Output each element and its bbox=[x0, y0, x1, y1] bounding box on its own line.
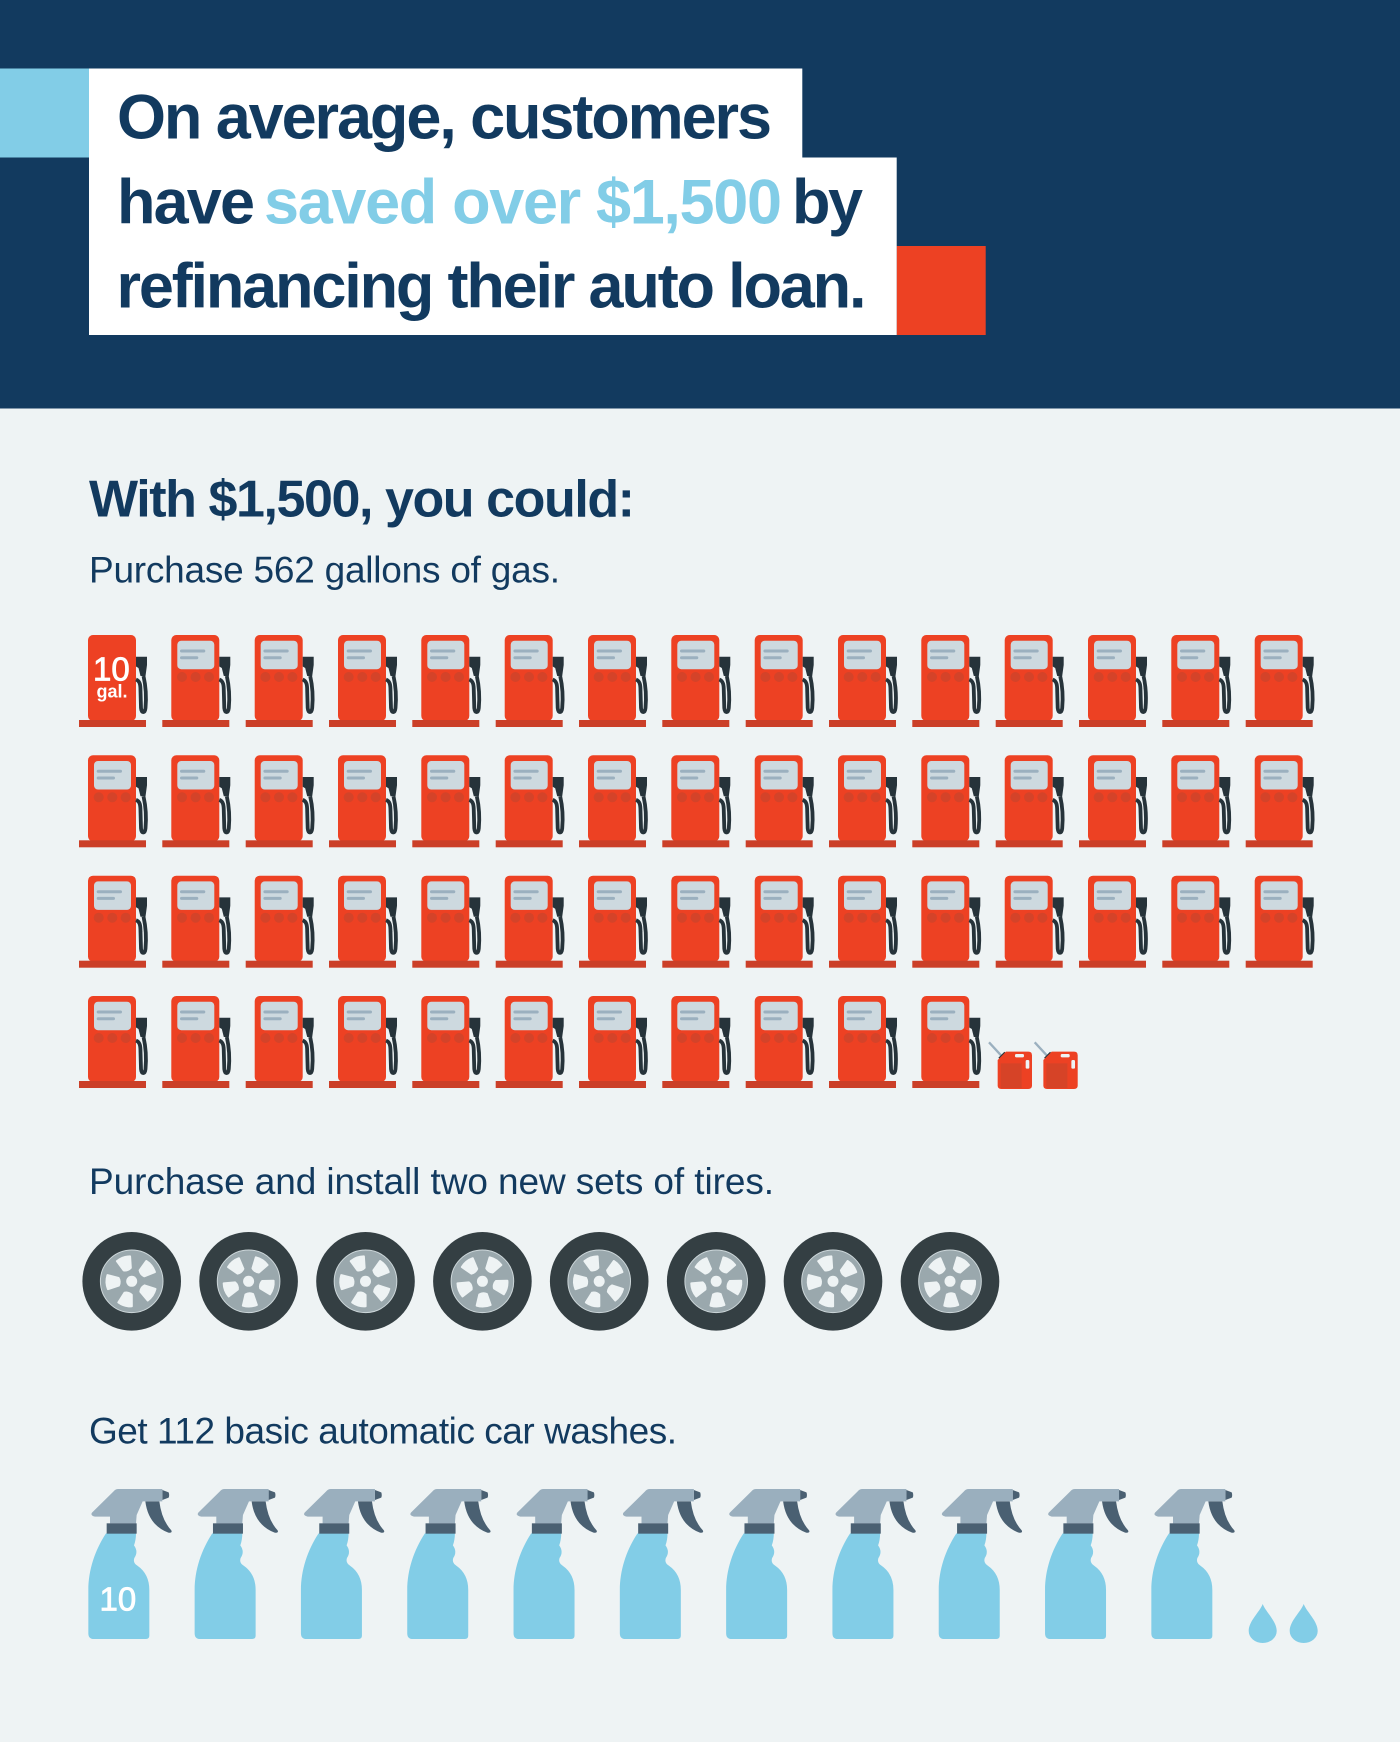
icon: spray bottle bbox=[620, 1489, 703, 1639]
icon: spray bottle bbox=[939, 1489, 1022, 1639]
icon: tire bbox=[784, 1232, 882, 1331]
icon: gas can bbox=[989, 1042, 1032, 1089]
section heading: With $1,500, you could: bbox=[89, 471, 635, 529]
red accent square bbox=[897, 246, 986, 335]
icon: spray bottle bbox=[832, 1489, 916, 1639]
car wash label: Get 112 basic automatic car washes. bbox=[89, 1410, 677, 1452]
icon: spray bottle bbox=[407, 1489, 491, 1639]
icon: spray bottle bbox=[514, 1489, 597, 1639]
icon: tire bbox=[199, 1232, 298, 1331]
tire icon row bbox=[82, 1232, 999, 1331]
icon: tire bbox=[901, 1232, 999, 1331]
title: by bbox=[792, 168, 863, 238]
icon: tire bbox=[433, 1232, 532, 1331]
icon: spray bottle labelled 10 bbox=[88, 1489, 172, 1639]
icon: spray bottle bbox=[726, 1489, 809, 1639]
icon: gas pump labelled 10 gal. bbox=[79, 635, 147, 727]
title: On average, customers bbox=[117, 82, 772, 152]
title: saved over $1,500 bbox=[264, 168, 782, 238]
gas label: Purchase 562 gallons of gas. bbox=[89, 550, 560, 590]
icon: tire bbox=[82, 1232, 181, 1331]
title: have bbox=[117, 168, 255, 238]
icon: spray bottle bbox=[195, 1489, 278, 1639]
stepped white title panel bbox=[89, 68, 897, 335]
icon: tire bbox=[550, 1232, 648, 1331]
icon: spray bottle bbox=[301, 1489, 384, 1639]
title bbox=[116, 82, 866, 322]
light blue accent square bbox=[0, 68, 89, 158]
title: refinancing their auto loan. bbox=[116, 252, 866, 322]
icon: spray bottle bbox=[1151, 1489, 1235, 1639]
row 3 of gas pumps bbox=[79, 876, 1314, 968]
icon: spray bottle bbox=[1045, 1489, 1128, 1639]
icon: gas pump labelled 10 gal.: gal. bbox=[96, 682, 128, 702]
icon: gas pump labelled 10 gal.: 10 bbox=[93, 651, 130, 688]
row 1 of gas pumps bbox=[162, 635, 1314, 727]
icon: tire bbox=[316, 1232, 415, 1331]
tires label: Purchase and install two new sets of tires. bbox=[89, 1161, 774, 1202]
icon: water drop bbox=[1290, 1604, 1318, 1643]
row 2 of gas pumps bbox=[79, 755, 1314, 847]
icon: water drop bbox=[1249, 1604, 1277, 1643]
icon: gas can bbox=[1035, 1042, 1078, 1089]
icon: spray bottle labelled 10: 10 bbox=[100, 1581, 136, 1618]
gas pump icon grid bbox=[79, 635, 1314, 1089]
row 4 of gas pumps bbox=[79, 996, 980, 1088]
icon: tire bbox=[667, 1232, 766, 1331]
spray bottle icon row bbox=[88, 1489, 1318, 1643]
header band bbox=[0, 0, 1400, 408]
